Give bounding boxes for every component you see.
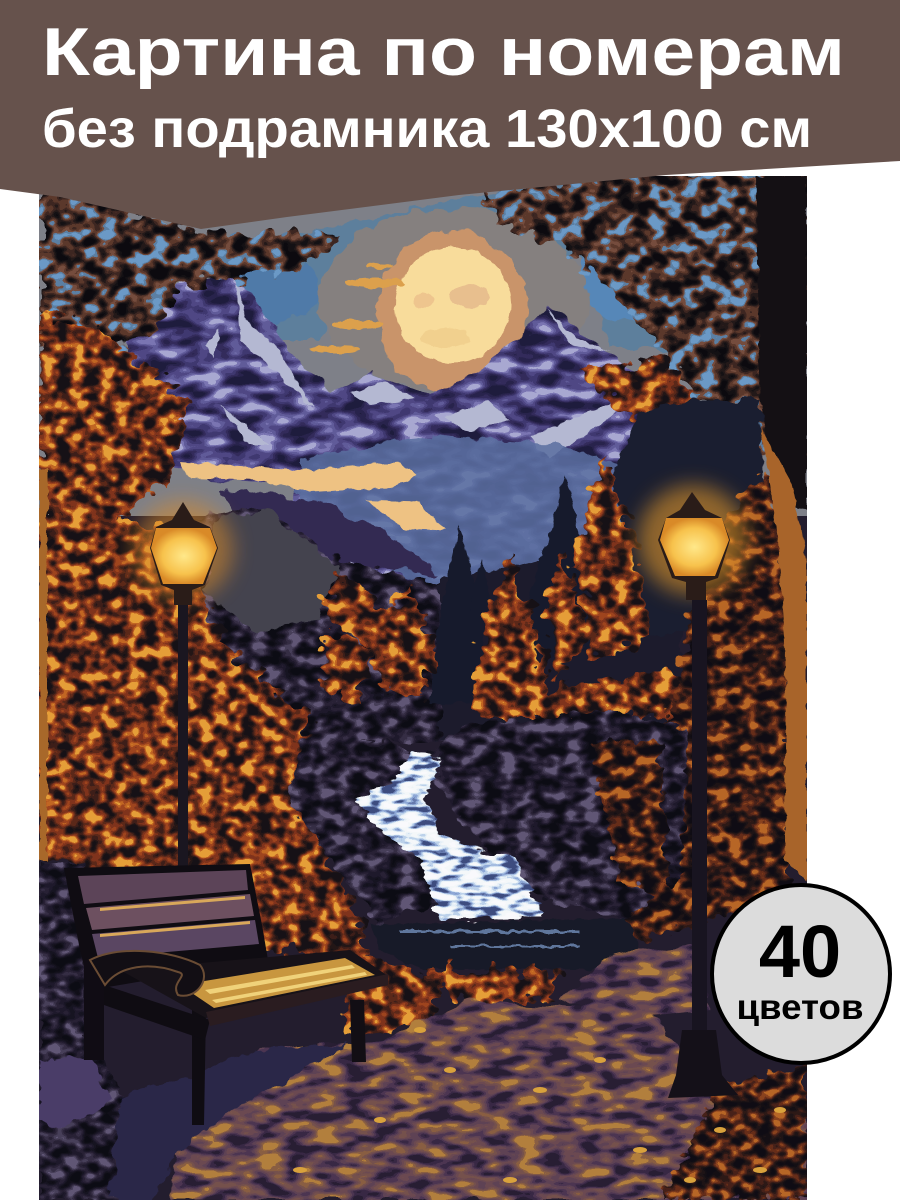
scattered yellow leaves bbox=[293, 1027, 786, 1183]
right foliage bbox=[624, 472, 794, 944]
distant forest bbox=[194, 508, 454, 746]
top-right tree bbox=[480, 170, 807, 470]
fir trees bbox=[430, 475, 590, 705]
title: Картина по номерам bbox=[42, 14, 845, 90]
moon bbox=[395, 247, 511, 363]
right lamp bbox=[638, 485, 748, 1098]
bench bbox=[64, 864, 388, 1125]
sky bbox=[39, 176, 807, 516]
bench back slats bbox=[78, 870, 248, 904]
waterfall bbox=[355, 750, 545, 920]
purple rock bottom left bbox=[39, 1055, 130, 1200]
pool bbox=[370, 918, 640, 970]
rocks behind waterfall bbox=[420, 710, 690, 920]
left trunk edge bbox=[39, 470, 47, 860]
badge: 40 colours: цветов bbox=[736, 988, 864, 1027]
orange trees bbox=[380, 450, 690, 720]
painting bbox=[39, 170, 807, 1200]
right trunk bbox=[756, 176, 807, 510]
bank rock bbox=[560, 945, 710, 1020]
golden leaves under right tree bbox=[575, 360, 700, 430]
forest base behind right trees bbox=[435, 561, 634, 742]
foreground right leaves bbox=[660, 1065, 807, 1200]
mountains bbox=[126, 278, 638, 584]
left lamp bbox=[133, 500, 233, 868]
bench armrest bbox=[90, 951, 204, 996]
bench frame bbox=[64, 864, 268, 990]
right mid pines bbox=[610, 400, 770, 640]
bank foliage bbox=[340, 950, 560, 1035]
left foliage bbox=[39, 310, 370, 960]
badge: 40 colours: 40 bbox=[759, 910, 841, 993]
forest trees bbox=[320, 570, 440, 700]
clouds by moon bbox=[309, 263, 405, 353]
right trunk edge bbox=[762, 430, 807, 880]
subtitle: без подрамника 130х100 см bbox=[42, 99, 812, 159]
header banner bbox=[0, 0, 900, 229]
ground path bbox=[170, 1000, 807, 1200]
bench seat bbox=[120, 950, 388, 1018]
left edge dark strip bbox=[39, 860, 85, 1070]
badge: 40 colours bbox=[712, 885, 890, 1063]
top-left tree bbox=[39, 185, 340, 350]
